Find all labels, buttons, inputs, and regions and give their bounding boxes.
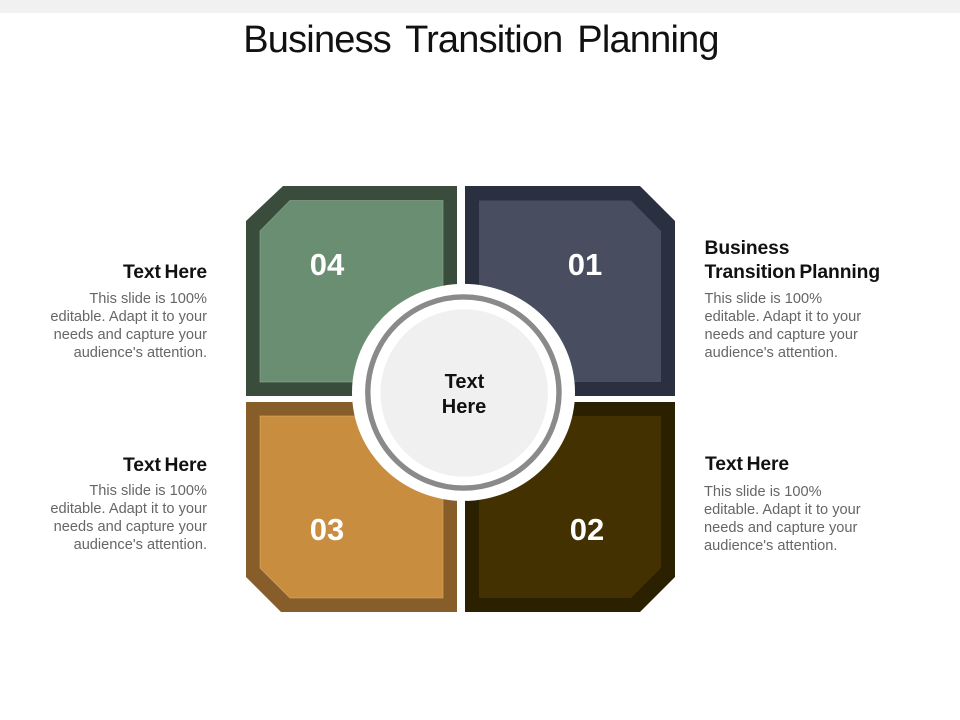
number 02: 02 — [570, 512, 604, 547]
title: Business Transition Planning — [243, 19, 719, 61]
text block: 02 — [704, 454, 861, 554]
heading 04: Text Here — [123, 262, 207, 283]
center circle — [352, 284, 575, 501]
body 03: This slide is 100% — [89, 483, 207, 499]
heading 03: Text Here — [123, 455, 207, 476]
text block: 03 — [50, 455, 207, 553]
panel: 02 dark brown — [465, 402, 675, 612]
panel: 04 green — [246, 186, 457, 396]
body 02: audience's attention. — [704, 538, 837, 554]
body 03: audience's attention. — [74, 537, 207, 553]
panel: 01 slate — [465, 186, 675, 396]
body 02 — [704, 484, 861, 554]
center label: Here — [442, 396, 486, 418]
body 02: needs and capture your — [704, 520, 857, 536]
body 01: This slide is 100% — [704, 291, 822, 307]
body 01 — [704, 291, 861, 361]
body 01: editable. Adapt it to your — [704, 309, 861, 325]
body 04: This slide is 100% — [89, 291, 207, 307]
heading 01 — [704, 238, 880, 283]
body 04: editable. Adapt it to your — [50, 309, 207, 325]
top grey band — [0, 0, 960, 13]
body 04: audience's attention. — [74, 345, 207, 361]
body 02: This slide is 100% — [704, 484, 822, 500]
panel: 03 orange — [246, 402, 457, 612]
heading 01: Business — [704, 238, 789, 259]
body 02: editable. Adapt it to your — [704, 502, 861, 518]
body 03: needs and capture your — [54, 519, 207, 535]
text block: 01 — [704, 238, 880, 361]
body 04: needs and capture your — [54, 327, 207, 343]
heading 02: Text Here — [705, 454, 789, 475]
body 03: editable. Adapt it to your — [50, 501, 207, 517]
number 03: 03 — [310, 512, 344, 547]
heading 01: Transition Planning — [704, 262, 880, 283]
center label: Text — [445, 371, 485, 393]
body 01: audience's attention. — [704, 345, 838, 361]
body 04 — [50, 291, 207, 361]
text block: 04 — [50, 262, 207, 361]
number 01: 01 — [568, 247, 602, 282]
body 01: needs and capture your — [704, 327, 858, 343]
number 04: 04 — [310, 247, 345, 282]
body 03 — [50, 483, 207, 553]
